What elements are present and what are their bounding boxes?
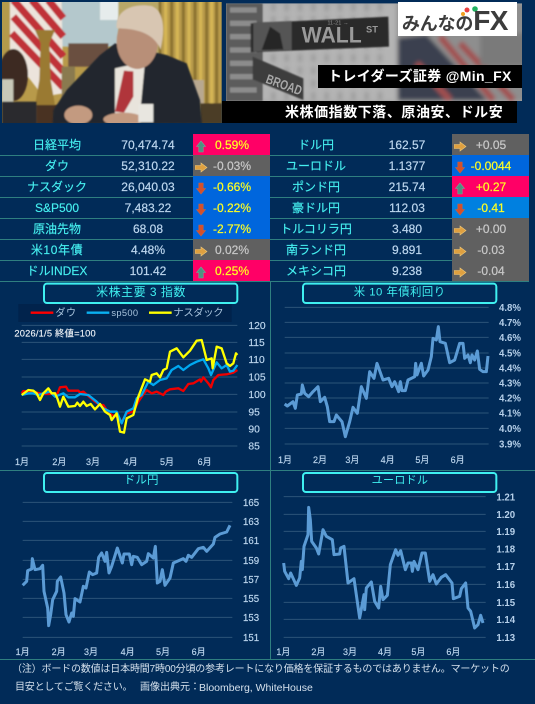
header photo: Wall Street sign: WALL [302,23,362,48]
row: ドル円: +0.05 [476,138,506,152]
x axis labels: 5月 [160,457,174,467]
x axis labels: 2月 [52,647,66,657]
x axis labels: 5月 [415,455,429,465]
row: 南ランド円: 南ランド円 [286,243,346,257]
row: メキシコ円: -0.04 [477,264,505,278]
row: ドルINDEX: ドルINDEX [27,264,87,278]
x axis labels: 4月 [121,647,135,657]
chart panel: US 10-year yield [278,282,521,465]
row: 原油先物: 原油先物 [33,222,81,236]
chart panel: EUR/USD [276,472,516,657]
x axis labels [276,647,460,657]
x axis labels: 6月 [198,457,212,467]
chart title [303,473,496,492]
y axis labels: 100 [248,390,266,401]
row: 原油先物: -2.77% [213,222,251,236]
y axis labels [496,492,516,644]
row: S&P500: 7,483.22 [125,201,171,215]
line: USD/JPY [23,525,230,626]
y axis labels: 165 [243,498,259,509]
y axis labels [243,498,259,644]
row: トルコリラ円: +0.00 [476,222,506,236]
row: ダウ [0,155,270,177]
row: 豪ドル円: 112.03 [389,201,425,215]
logo [398,2,517,36]
base date note: 2026/1/5 終値=100 [14,328,96,339]
legend: ナスダック [173,306,223,319]
y axis labels [248,321,266,453]
line: S&P 500 [22,359,237,423]
footer note: 画像出典元： [140,682,200,693]
y axis labels: 115 [248,338,265,349]
y axis labels: 1.20 [496,510,515,521]
chart title: 米 10 年債利回り [354,285,446,299]
header photo: president signing at desk [2,2,222,123]
row: 豪ドル円: 豪ドル円 [292,201,340,215]
x axis labels: 3月 [343,647,357,657]
row: ダウ: 52,310.22 [121,159,175,173]
chart title [303,284,496,303]
y axis labels: 4.3% [499,379,521,390]
x axis labels: 5月 [156,647,170,657]
y axis labels: 1.21 [496,492,516,503]
y axis labels: 110 [248,355,265,366]
chart title: ドル円 [124,475,159,487]
row: ユーロドル: ユーロドル [286,159,346,173]
x axis labels: 2月 [52,457,66,467]
y axis labels: 4.6% [499,333,521,344]
y axis labels: 1.13 [496,633,516,644]
row: S&P500: S&P500 [35,201,79,215]
y axis labels: 1.14 [496,615,516,626]
chart title: 米株主要 3 指数 [96,284,186,299]
row: ドル円: ドル円 [298,138,334,152]
y axis labels: 4.7% [499,318,521,329]
row: トルコリラ円: トルコリラ円 [280,222,352,236]
x axis labels: 3月 [345,455,359,465]
chart title [44,284,237,303]
row: トルコリラ円 [270,218,529,240]
chart panel: USD/JPY [16,472,259,657]
y axis labels: 1.19 [496,527,516,538]
y axis labels: 4.2% [499,394,521,405]
legend: ダウ [55,306,77,319]
x axis labels: 1月 [276,647,290,657]
row: S&P500: -0.22% [213,201,251,215]
y axis labels: 163 [243,517,259,528]
x axis labels: 5月 [411,647,425,657]
row: ポンド円: 215.74 [389,180,425,194]
y axis labels: 85 [248,442,260,453]
row: 米10年債 [0,239,270,261]
x axis labels [16,647,206,657]
x axis labels: 4月 [124,457,138,467]
row: ユーロドル: -0.0044 [471,159,511,173]
logo text: みんなのFX [402,5,508,36]
row: ドルINDEX: 101.42 [130,264,166,278]
y axis labels: 157 [243,575,259,586]
row: 米10年債: 米10年債 [31,243,83,257]
y axis labels: 151 [243,633,259,644]
row: メキシコ円: メキシコ円 [286,264,346,278]
line: EUR/USD [284,507,483,628]
x axis labels: 3月 [86,457,100,467]
black band: headline [222,101,517,123]
row: メキシコ円: 9.238 [392,264,422,278]
x axis labels: 4月 [378,647,392,657]
row: ドル円 [270,134,529,156]
row: 原油先物: 68.08 [133,222,163,236]
headline text: 米株価指数下落、原油安、ドル安 [285,104,503,120]
trader label: トレイダーズ証券 @Min_FX [328,68,512,84]
footer note: 目安としてご覧ください。 [15,682,132,693]
chart title: ユーロドル [372,474,428,486]
y axis labels: 105 [248,373,266,384]
y axis labels: 120 [248,321,266,332]
row: 原油先物 [0,218,270,240]
legend: sp500 [111,308,138,318]
chart panel: US stock indices [14,282,266,467]
y axis labels: 161 [243,536,259,547]
y axis labels: 95 [248,408,260,419]
row: S&P500 [0,197,270,219]
x axis labels: 4月 [381,455,395,465]
footer note: （注）ボードの数値は日本時間7時00分頃の参考レートになり価格を保証するものではありません。マーケットの [12,664,510,675]
table: left market indices [0,134,270,282]
row: 日経平均: 0.59% [215,138,249,152]
x axis labels: 3月 [84,647,98,657]
row: ナスダック: 26,040.03 [121,180,175,194]
y axis labels: 4.5% [499,349,521,360]
x axis labels: 1月 [278,455,292,465]
header photo: Wall Street sign [226,3,522,101]
row: ドルINDEX: 0.25% [215,264,249,278]
x axis labels: 6月 [451,455,465,465]
y axis labels: 1.16 [496,580,516,591]
row: トルコリラ円: 3.480 [392,222,422,236]
row: 日経平均: 日経平均 [33,138,81,152]
y axis labels: 1.18 [496,545,516,556]
row: 日経平均: 70,474.74 [121,138,175,152]
row: ユーロドル [270,155,529,177]
y axis labels: 153 [243,613,259,624]
line: yield [285,327,488,437]
y axis labels: 3.9% [499,440,521,451]
x axis labels: 1月 [16,647,30,657]
x axis labels [15,457,212,467]
row: ドルINDEX [0,260,270,282]
y axis labels: 4.1% [499,409,521,420]
y axis labels: 1.17 [496,562,515,573]
x axis labels: 2月 [313,455,327,465]
footer note [12,663,510,694]
x axis labels: 6月 [446,647,460,657]
legend [18,304,232,322]
row: ポンド円: ポンド円 [292,180,340,194]
header photo: Wall Street sign: BROAD [264,71,304,98]
y axis labels: 90 [248,425,260,436]
y axis labels: 4.0% [499,424,521,435]
header photo: Wall Street sign: ST [366,25,378,35]
row: ナスダック [0,176,270,198]
logo dots [461,6,478,16]
row: 豪ドル円 [270,197,529,219]
row: ポンド円 [270,176,529,198]
row: ドル円: 162.57 [389,138,425,152]
row: 豪ドル円: -0.41 [477,201,505,215]
x axis labels [278,455,465,465]
row: 南ランド円 [270,239,529,261]
line: Dow [22,370,237,422]
row: ユーロドル: 1.1377 [389,159,425,173]
table: right currencies [270,134,529,282]
footer note: Bloomberg, WhiteHouse [199,682,313,694]
row: ダウ: -0.03% [213,159,251,173]
row: 米10年債: 4.48% [131,243,165,257]
row: 日経平均 [0,134,270,156]
x axis labels: 2月 [311,647,325,657]
trader label [318,65,522,88]
header photo: Wall Street sign: 11-21 → [327,21,349,27]
row: ナスダック: -0.66% [213,180,251,194]
x axis labels: 1月 [15,457,29,467]
row: ポンド円: +0.27 [476,180,506,194]
line: Nasdaq [22,340,237,433]
row: ナスダック: ナスダック [27,180,87,194]
y axis labels: 1.15 [496,598,516,609]
row: 南ランド円: -0.03 [477,243,505,257]
y axis labels: 159 [243,556,259,567]
y axis labels [499,303,521,451]
row: 米10年債: 0.02% [215,243,249,257]
row: メキシコ円 [270,260,529,282]
chart title [44,473,237,492]
y axis labels: 4.8% [499,303,521,314]
y axis labels: 155 [243,594,259,605]
x axis labels: 6月 [192,647,206,657]
row: ダウ: ダウ [45,159,69,173]
row: 南ランド円: 9.891 [392,243,422,257]
y axis labels: 4.4% [499,364,521,375]
